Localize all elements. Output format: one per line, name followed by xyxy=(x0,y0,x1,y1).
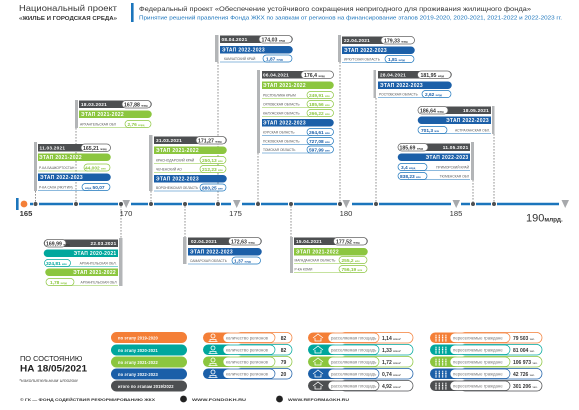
heading: federal project: Принятие решений правления Фонда ЖКХ по заявкам от регионов на финансирование этапов 2019-2020, 2020-2021, 2021-2022 и 2022-2023 гг. xyxy=(139,14,562,22)
card: 02.04.2021: САМАРСКАЯ ОБЛАСТЬ xyxy=(190,259,227,263)
stats: resettled area: 1,14 млн.м² xyxy=(382,336,401,342)
card: 22.03.2021: ЭТАП 2021-2022 xyxy=(73,270,116,276)
card: 11.05.2021: 3,4 млрд xyxy=(401,165,416,171)
card: 11.03.2021: ЭТАП 2021-2022 xyxy=(39,155,82,161)
stats: resettled area xyxy=(308,332,413,391)
card: 11.03.2021: 165,21 млрд xyxy=(83,146,107,152)
status text xyxy=(19,354,87,384)
card: 06.04.2021: 185,56 млн xyxy=(309,102,330,108)
card: 02.04.2021: 1,37 млрд xyxy=(234,258,251,264)
card: 06.04.2021: КУРСКАЯ ОБЛАСТЬ xyxy=(263,130,294,134)
card: 22.03.2021: 1,78 млрд xyxy=(50,280,67,286)
card: 15.04.2021: ЭТАП 2021-2022 xyxy=(296,250,339,256)
card: 06.04.2021: 727,08 млн xyxy=(309,139,330,145)
stats: regions: 79 xyxy=(281,360,286,366)
card: 06.04.2021: РЕСПУБЛИКА КРЫМ xyxy=(263,94,296,98)
card: 02.04.2021: ЭТАП 2022-2023 xyxy=(190,250,233,256)
stats: resettled residents: 81 004 чел. xyxy=(513,348,535,354)
card: 11.03.2021 xyxy=(34,142,111,191)
stats: resettled residents: 42 726 чел. xyxy=(513,372,535,378)
stats: regions: 20 xyxy=(281,372,286,378)
card: 11.03.2021: ЭТАП 2022-2023 xyxy=(40,175,83,181)
card: 06.04.2021: 597,99 млн xyxy=(309,148,330,154)
card: 22.03.2021: 324,81 млн xyxy=(46,261,67,267)
card: 15.04.2021: 177,52 млрд xyxy=(336,239,360,245)
card: 28.04.2021: 28.04.2021 xyxy=(380,73,406,78)
card: 28.04.2021: РОСТОВСКАЯ ОБЛАСТЬ xyxy=(379,92,418,96)
stats: resettled residents: переселяемые граждане xyxy=(453,359,503,364)
card: 22.03.2021: 22.03.2021 xyxy=(91,241,117,246)
card: 11.05.2021: ЭТАП 2022-2023 xyxy=(426,155,468,161)
card: 18.05.2021: ЭТАП 2022-2023 xyxy=(446,118,489,124)
footer xyxy=(20,396,349,402)
card: 15.04.2021: 756,19 млн xyxy=(342,267,363,273)
card: 11.05.2021: ПРИМОРСКИЙ КРАЙ xyxy=(436,166,470,170)
stats: resettled area: 1,72 млн.м² xyxy=(382,360,401,366)
card: 06.04.2021: ПСКОВСКАЯ ОБЛАСТЬ xyxy=(263,140,300,144)
legend: stages: по этапу 2020-2021 xyxy=(118,348,158,353)
heading: federal project: Федеральный проект «Обеспечение устойчивого сокращения непригодного для проживания жилищного фонда» xyxy=(139,5,532,13)
card: 06.04.2021: 266,22 млн xyxy=(309,111,330,117)
stats: resettled area: расселяемая площадь xyxy=(331,347,377,352)
card: 18.03.2021: АРХАНГЕЛЬСКАЯ ОБЛ xyxy=(80,122,116,126)
card: 31.03.2021: 171,27 млрд xyxy=(198,138,222,144)
stats: resettled area: 1,33 млн.м² xyxy=(382,348,401,354)
card: 11.03.2021: Р-КА БАШКОРТОСТАН xyxy=(39,166,75,170)
card: 06.04.2021: ЭТАП 2021-2022 xyxy=(263,83,306,89)
stats: resettled area: расселяемая площадь xyxy=(331,383,377,388)
card: 31.03.2021: ЧЕЧЕНСКИЙ АО xyxy=(156,168,182,172)
footer: © ГК — ФОНД СОДЕЙСТВИЯ РЕФОРМИРОВАНИЮ ЖКХ xyxy=(20,397,155,402)
card: 15.04.2021: 255,2 млн xyxy=(342,258,360,264)
title: national project xyxy=(19,3,117,22)
status text: *накопительным итогом xyxy=(19,378,78,384)
stats: resettled residents: 106 973 чел. xyxy=(513,360,538,366)
card: 15.04.2021: 15.04.2021 xyxy=(296,239,322,244)
card: 22.03.2021: АРХАНГЕЛЬСКАЯ ОБЛ. xyxy=(80,262,117,266)
timeline axis: 185 xyxy=(450,209,462,218)
card: 02.04.2021 xyxy=(183,237,262,264)
card: 08.04.2021: 1,87 млрд xyxy=(266,56,283,62)
card: 31.03.2021: 880,25 млн xyxy=(202,186,223,192)
timeline axis: 180 xyxy=(340,209,352,218)
card: 08.04.2021 xyxy=(215,35,293,62)
stats: regions: количество регионов xyxy=(226,335,269,340)
card: 02.04.2021: 172,63 млрд xyxy=(231,239,255,245)
stats: regions: количество регионов xyxy=(226,359,269,364)
card: 31.03.2021: ЭТАП 2022-2023 xyxy=(156,176,199,182)
card: 22.03.2021: АРХАНГЕЛЬСКАЯ ОБЛ xyxy=(81,280,116,284)
stats: resettled area: 4,92 млн.м² xyxy=(382,384,401,390)
card: 18.03.2021: 2,76 млрд xyxy=(128,122,145,128)
card: 22.03.2021: 169,99 млрд xyxy=(46,241,70,247)
card: 31.03.2021: 250,13 млн xyxy=(202,158,223,164)
legend: stages xyxy=(111,332,187,392)
card: 15.04.2021: МАГАДАНСКАЯ ОБЛАСТЬ xyxy=(294,258,335,262)
card: 02.04.2021: 02.04.2021 xyxy=(191,239,217,244)
stats: resettled residents xyxy=(430,332,542,391)
card: 11.03.2021: 11.03.2021 xyxy=(40,146,65,151)
timeline axis: 190млрд. xyxy=(526,212,563,224)
card: 22.04.2021: ИРКУТСКАЯ ОБЛАСТЬ xyxy=(344,58,380,62)
status text: ПО СОСТОЯНИЮ xyxy=(20,354,83,363)
card: 22.04.2021: 1,81 млрд xyxy=(388,57,405,63)
card: 15.04.2021 xyxy=(290,237,368,273)
card: 31.03.2021: КРАСНОДАРСКИЙ КРАЙ xyxy=(156,158,195,162)
card: 31.03.2021 xyxy=(149,135,227,192)
stats: resettled residents: переселяемые граждане xyxy=(453,347,503,352)
legend: stages: итого по этапам 2019/2022 xyxy=(118,384,174,389)
card: 15.04.2021: Р-КА КОМИ xyxy=(294,268,313,272)
card: 06.04.2021 xyxy=(257,70,334,154)
card: 11.03.2021: Р-КА САХА (ЯКУТИЯ) xyxy=(39,186,73,190)
card: 31.03.2021: ЭТАП 2021-2022 xyxy=(156,148,199,154)
timeline axis: 175 xyxy=(229,209,242,218)
card: 06.04.2021: 06.04.2021 xyxy=(263,73,289,78)
card: 18.05.2021: 701,3 млн xyxy=(421,128,440,134)
status text: НА 18/05/2021 xyxy=(20,364,87,374)
footer: WWW.REFORMAGKH.RU xyxy=(288,397,349,402)
card: 11.05.2021: 838,23 млн xyxy=(400,174,421,180)
card: 18.05.2021: 18.05.2021 xyxy=(463,108,489,113)
card: 06.04.2021: 176,4 млрд xyxy=(304,73,325,79)
timeline axis xyxy=(16,198,569,224)
card: 28.04.2021: 2,62 млрд xyxy=(425,92,442,98)
card: 31.03.2021: ВОРОНЕЖСКАЯ ОБЛАСТЬ xyxy=(156,186,198,190)
card: 08.04.2021: 08.04.2021 xyxy=(222,37,248,42)
card: 28.04.2021: ЭТАП 2022-2023 xyxy=(380,83,423,89)
card: 22.04.2021: 179,33 млрд xyxy=(384,38,408,44)
card: 31.03.2021: 212,23 млн xyxy=(202,167,223,173)
stats: resettled residents: 301 206 чел. xyxy=(513,384,538,390)
card: 18.05.2021: АСТРАХАНСКАЯ ОБЛ. xyxy=(455,128,490,132)
timeline axis: 170 xyxy=(120,209,132,218)
card: 08.04.2021: 174,03 млрд xyxy=(262,37,286,43)
card: 22.04.2021 xyxy=(338,35,415,63)
legend: stages: по этапу 2019-2020 xyxy=(118,336,158,340)
card: 06.04.2021: 249,91 млн xyxy=(309,93,330,99)
stats: resettled area: 0,74 млн.м² xyxy=(382,372,401,378)
card: 18.03.2021 xyxy=(75,100,152,128)
card: 06.04.2021: ЭТАП 2022-2023 xyxy=(263,120,306,126)
card: 06.04.2021: КАЛУЖСКАЯ ОБЛАСТЬ xyxy=(263,112,300,116)
card: 22.04.2021: 22.04.2021 xyxy=(344,38,370,43)
title: national project: «ЖИЛЬЕ И ГОРОДСКАЯ СРЕДА» xyxy=(19,16,117,22)
card: 11.05.2021: ТЮМЕНСКАЯ ОБЛ xyxy=(440,174,469,178)
card: 06.04.2021: ОРЛОВСКАЯ ОБЛАСТЬ xyxy=(263,102,300,106)
card: 08.04.2021: ЭТАП 2022-2023 xyxy=(222,48,265,54)
stats: regions: 82 xyxy=(281,348,286,354)
card: 31.03.2021: 31.03.2021 xyxy=(156,138,182,143)
card: 11.05.2021: 185,69 млрд xyxy=(400,145,424,151)
card: 22.03.2021 xyxy=(44,238,122,286)
card: 22.04.2021: ЭТАП 2022-2023 xyxy=(344,48,387,54)
card: 18.03.2021: 167,88 млрд xyxy=(124,102,148,108)
footer: WWW.FONDGKH.RU xyxy=(192,397,246,402)
stats: resettled residents: переселяемые граждане xyxy=(453,383,503,388)
stats: resettled area: расселяемая площадь xyxy=(331,359,377,364)
card: 11.03.2021: 44,002 млн xyxy=(85,166,106,172)
card: 11.05.2021 xyxy=(398,142,474,180)
card: 18.05.2021: 186,64 млрд xyxy=(420,108,444,114)
card: 08.04.2021: КАМЧАТСКИЙ КРАЙ xyxy=(224,57,256,61)
legend: stages: по этапу 2021-2022 xyxy=(118,360,158,365)
card: 28.04.2021: 181,95 млрд xyxy=(420,73,445,79)
card: 18.03.2021: ЭТАП 2021-2022 xyxy=(81,112,124,118)
stats: regions xyxy=(203,332,292,379)
stats: resettled area: расселяемая площадь xyxy=(331,335,377,340)
stats: regions: количество регионов xyxy=(226,371,269,376)
card: 06.04.2021: ТОМСКАЯ ОБЛАСТЬ xyxy=(263,148,295,152)
title: national project: Национальный проект xyxy=(19,3,117,13)
card: 28.04.2021 xyxy=(374,70,452,98)
heading: federal project xyxy=(131,3,562,22)
card: 06.04.2021: 264,61 млн xyxy=(309,130,330,136)
stats: resettled residents: 79 503 чел. xyxy=(513,336,535,342)
stats: resettled area: расселяемая площадь xyxy=(331,371,377,376)
legend: stages: по этапу 2022-2023 xyxy=(118,372,158,377)
card: 22.03.2021: ЭТАП 2020-2021 xyxy=(74,251,116,257)
stats: resettled residents: переселяемые граждане xyxy=(453,371,503,376)
connectors xyxy=(36,62,494,238)
card: 11.05.2021: 11.05.2021 xyxy=(443,145,469,150)
stats: regions: количество регионов xyxy=(226,347,269,352)
stats: regions: 82 xyxy=(281,336,286,342)
card: 18.03.2021: 18.03.2021 xyxy=(81,102,107,107)
card: 11.03.2021: млрд 50,07 xyxy=(85,185,105,191)
timeline axis: 165 xyxy=(20,209,33,218)
stats: resettled residents: переселяемые граждане xyxy=(453,335,503,340)
card: 18.05.2021 xyxy=(418,106,494,134)
